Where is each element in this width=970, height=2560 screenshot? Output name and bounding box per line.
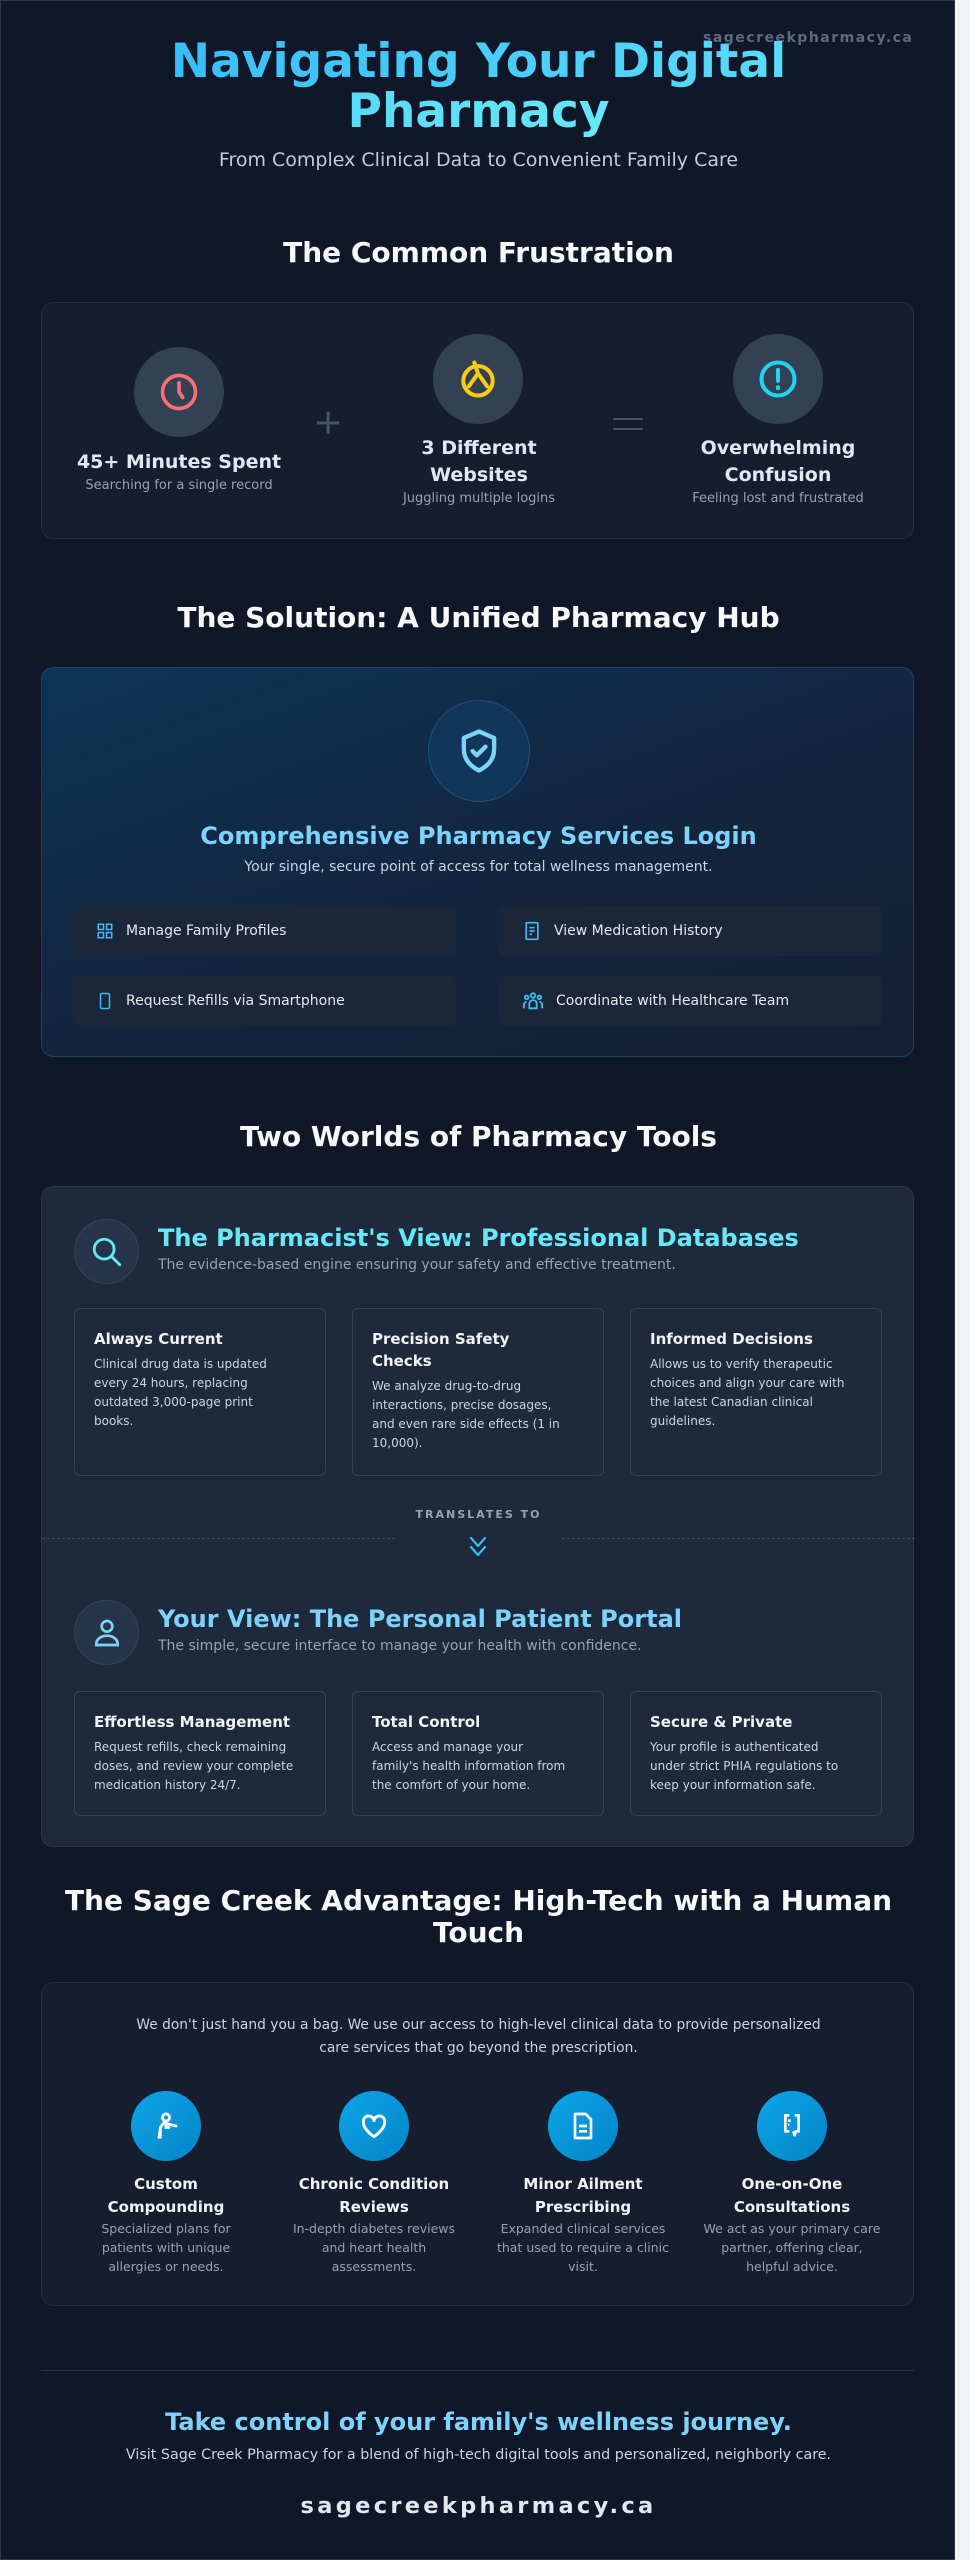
card: effortless: medication history 24/7. (94, 1778, 241, 1792)
watermark: sagecreekpharmacy.ca (703, 30, 913, 46)
icon: document (548, 2091, 618, 2161)
title: Pharmacy (348, 84, 610, 139)
card: effortless: Effortless Management (94, 1713, 290, 1731)
card: secure: Secure & Private (650, 1713, 792, 1731)
feature: family profiles (73, 906, 456, 956)
footer heading: Take control of your family's wellness journey. (165, 2408, 792, 2436)
stat: websites (402, 437, 555, 506)
feature: healthcare team: Coordinate with Healthcare Team (556, 993, 789, 1009)
panel: two worlds (41, 1186, 914, 1847)
card: informed decisions: guidelines. (650, 1414, 715, 1428)
feature: medication history: View Medication History (554, 923, 722, 939)
icon: search (74, 1219, 139, 1284)
service: minor ailment: Expanded clinical services that used to require a clinic visit. (497, 2221, 669, 2274)
card: total control: Access and manage your (372, 1740, 523, 1754)
card: total control (352, 1691, 604, 1816)
card: informed decisions: choices and align your care with (650, 1376, 844, 1390)
card: informed decisions: the latest Canadian clinical (650, 1395, 813, 1409)
title (171, 34, 786, 139)
card: precision safety: Precision Safety (372, 1330, 509, 1348)
card: always current: Always Current (94, 1330, 223, 1348)
icon: shield (428, 700, 530, 802)
intro text: We don't just hand you a bag. We use our access to high-level clinical data to provide personalized care services that go beyond the prescription. (136, 2017, 821, 2056)
heading: common frustration: The Common Frustration (283, 236, 674, 269)
feature: family profiles: Manage Family Profiles (126, 923, 286, 939)
card: secure: under strict PHIA regulations to (650, 1759, 838, 1773)
patient subtext: The simple, secure interface to manage your health with confidence. (158, 1638, 642, 1654)
service: chronic (293, 2091, 455, 2274)
service: compounding: Custom (134, 2175, 198, 2193)
icon: equals (613, 418, 643, 430)
card: precision safety (352, 1308, 604, 1476)
service: chronic: Reviews (339, 2198, 409, 2216)
feature: refills (73, 976, 456, 1026)
card: effortless: doses, and review your complete (94, 1759, 293, 1773)
card: total control: Total Control (372, 1713, 480, 1731)
icon: clock (134, 347, 224, 437)
icon: compounding (131, 2091, 201, 2161)
stat: websites: Juggling multiple logins (403, 491, 555, 506)
card: precision safety: 10,000). (372, 1436, 422, 1450)
translates to label: TRANSLATES TO (416, 1508, 541, 1521)
login heading: Comprehensive Pharmacy Services Login (200, 822, 757, 850)
stat: minutes: Searching for a single record (85, 478, 273, 493)
subtitle: From Complex Clinical Data to Convenient Family Care (219, 149, 738, 171)
title: Navigating Your Digital (171, 34, 786, 89)
card: always current: books. (94, 1414, 133, 1428)
divider right (562, 1538, 915, 1539)
panel: solution hub (41, 667, 914, 1057)
service: consultations: Consultations (734, 2198, 850, 2216)
card: secure: Your profile is authenticated (650, 1740, 819, 1754)
stat: minutes: 45+ Minutes Spent (77, 451, 281, 473)
stat: confusion: Overwhelming (701, 437, 855, 459)
stat: websites: 3 Different (421, 437, 537, 459)
login subtext: Your single, secure point of access for total wellness management. (244, 859, 713, 875)
pharmacist heading: The Pharmacist's View: Professional Databases (158, 1224, 799, 1252)
icon: websites (433, 334, 523, 424)
service: compounding: Compounding (108, 2198, 224, 2216)
service: minor ailment: Minor Ailment (523, 2175, 643, 2193)
card: total control: family's health information from (372, 1759, 565, 1773)
card: secure: keep your information safe. (650, 1778, 816, 1792)
card: informed decisions: Allows us to verify therapeutic (650, 1357, 833, 1371)
footer url: sagecreekpharmacy.ca (301, 2493, 656, 2519)
service: consultations: One-on-One (742, 2175, 842, 2193)
service: chronic: Chronic Condition (299, 2175, 449, 2193)
card: effortless (74, 1691, 326, 1816)
stat: confusion: Feeling lost and frustrated (692, 491, 864, 506)
card: precision safety: We analyze drug-to-drug (372, 1379, 521, 1393)
stat: confusion: Confusion (725, 464, 831, 486)
card: total control: the comfort of your home. (372, 1778, 530, 1792)
service: minor ailment (497, 2091, 669, 2274)
service: minor ailment: Prescribing (535, 2198, 631, 2216)
card: precision safety: and even rare side effects (1 in (372, 1417, 560, 1431)
service: compounding (101, 2091, 231, 2274)
patient heading: Your View: The Personal Patient Portal (158, 1605, 682, 1633)
card: always current: Clinical drug data is updated (94, 1357, 267, 1371)
card: effortless: Request refills, check remaining (94, 1740, 286, 1754)
stat: websites: Websites (430, 464, 528, 486)
icon: alert (733, 334, 823, 424)
panel: frustration (41, 302, 914, 539)
service: consultations: We act as your primary care partner, offering clear, helpful advice. (704, 2221, 880, 2274)
service: compounding: Specialized plans for patients with unique allergies or needs. (101, 2221, 231, 2274)
arrow: double chevron (470, 1536, 486, 1556)
card: informed decisions (630, 1308, 882, 1476)
card: always current (74, 1308, 326, 1476)
icon: plus: + (313, 402, 343, 443)
card: always current: every 24 hours, replacing (94, 1376, 248, 1390)
feature: refills: Request Refills via Smartphone (126, 993, 345, 1009)
stat: confusion (692, 437, 864, 506)
card: secure (630, 1691, 882, 1816)
footer text: Visit Sage Creek Pharmacy for a blend of high-tech digital tools and personalized, neighborly care. (126, 2447, 831, 2463)
stat: minutes (77, 451, 281, 493)
card: always current: outdated 3,000-page print (94, 1395, 253, 1409)
panel: advantage (41, 1982, 914, 2306)
service: chronic: In-depth diabetes reviews and heart health assessments. (293, 2221, 455, 2274)
card: informed decisions: Informed Decisions (650, 1330, 813, 1348)
divider (41, 2370, 914, 2371)
service: consultations (704, 2091, 880, 2274)
divider left (42, 1538, 395, 1539)
pharmacist subtext: The evidence-based engine ensuring your safety and effective treatment. (158, 1257, 676, 1273)
feature: healthcare team (499, 976, 882, 1026)
card: precision safety: interactions, precise dosages, (372, 1398, 551, 1412)
heading: solution: The Solution: A Unified Pharmacy Hub (177, 601, 780, 634)
icon: chat (757, 2091, 827, 2161)
heading: two worlds: Two Worlds of Pharmacy Tools (240, 1120, 717, 1153)
feature: medication history (499, 906, 882, 956)
icon: person (74, 1600, 139, 1665)
icon: heart (339, 2091, 409, 2161)
card: precision safety: Checks (372, 1352, 432, 1370)
heading: advantage: The Sage Creek Advantage: High-Tech with a Human Touch (65, 1884, 892, 1949)
